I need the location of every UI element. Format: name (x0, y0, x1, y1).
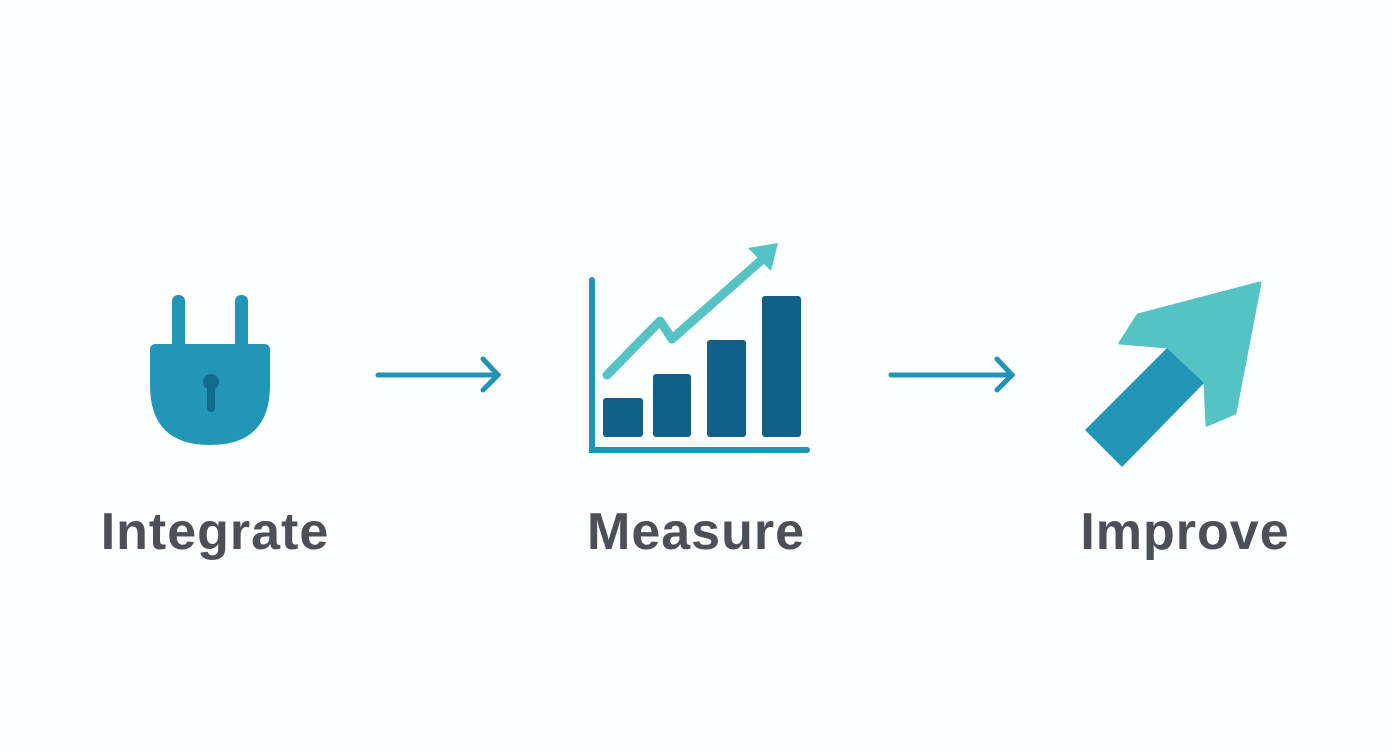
arrow 2 (891, 359, 1012, 390)
label: Integrate: Integrate (101, 503, 329, 561)
label: Measure: Measure (587, 503, 805, 561)
icon: plug (150, 295, 270, 445)
icon: chart (592, 243, 807, 450)
arrow 1 (378, 359, 498, 390)
label: Improve: Improve (1080, 503, 1290, 561)
icon: improve arrow (1085, 283, 1260, 467)
